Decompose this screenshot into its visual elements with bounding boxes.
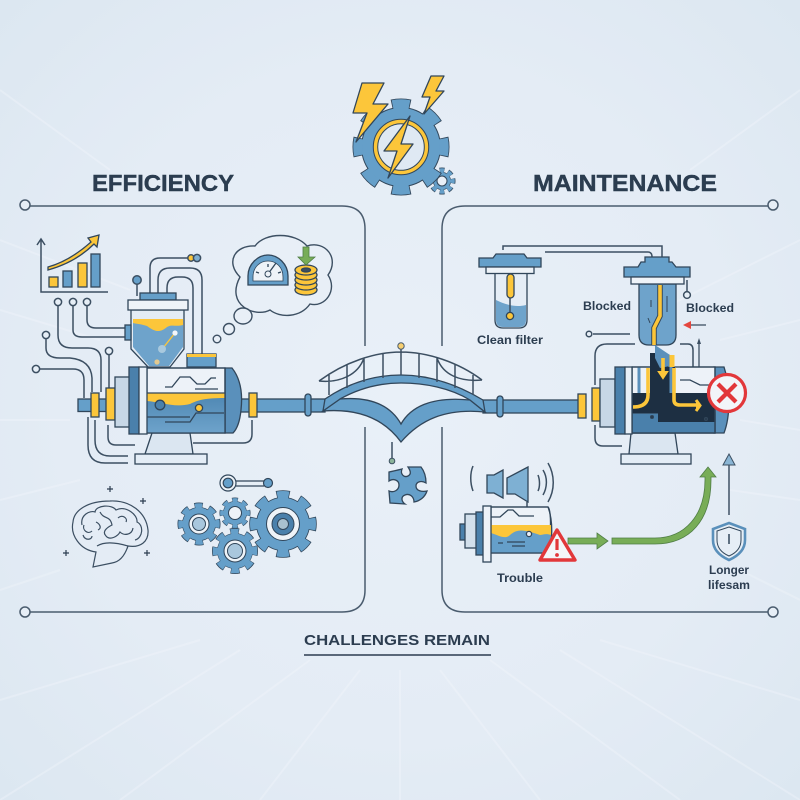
icon: down arrow — [298, 247, 315, 265]
label: blocked right: Blocked — [686, 301, 734, 315]
thought bubble: gauge and coins — [213, 236, 332, 343]
icon: brain — [63, 486, 150, 567]
gear c — [216, 532, 254, 570]
icon: gear with lightning — [353, 76, 452, 191]
label: longer lifesam: lifesam — [708, 578, 750, 592]
icon: gauge — [248, 255, 288, 285]
icon: small bolt — [422, 76, 444, 114]
illustration: blocked filter — [624, 257, 690, 345]
icon: coin stack — [295, 265, 317, 295]
panel: efficiency frame — [20, 200, 365, 617]
panel: maintenance frame — [442, 200, 778, 617]
arrow: red pointer — [683, 321, 706, 329]
illustration: right pump — [578, 345, 746, 464]
icon: warning triangle — [540, 530, 575, 560]
pump housing — [115, 367, 242, 434]
gear link — [220, 475, 272, 491]
filter hopper — [125, 293, 216, 367]
pump base — [135, 433, 207, 464]
icon: gears cluster — [181, 475, 312, 570]
arrow: up life — [723, 454, 735, 515]
label: longer lifesam: Longer — [709, 563, 749, 577]
pipeline: main shaft — [78, 394, 580, 417]
label: clean filter: Clean filter — [477, 333, 543, 347]
heading: maintenance: MAINTENANCE — [533, 170, 717, 196]
icon: speakers — [471, 463, 553, 512]
arrow: green curve — [612, 467, 716, 544]
heading: challenges remain: CHALLENGES REMAIN — [304, 632, 490, 649]
illustration: clean filter — [479, 246, 662, 328]
icon: centre bolt — [384, 116, 413, 178]
icon: puzzle piece — [389, 467, 427, 504]
icon: shield — [713, 523, 745, 560]
illustration: left pump — [91, 293, 257, 464]
gear a — [181, 506, 217, 542]
label: blocked left: Blocked — [583, 299, 631, 313]
gear d — [254, 495, 312, 553]
bridge truss — [319, 348, 482, 395]
wiring: left pump — [32, 254, 252, 463]
label: longer lifesam — [708, 563, 750, 592]
yellow flow arrows — [633, 355, 700, 411]
wiring: right pump — [586, 280, 701, 446]
illustration: trouble pump — [460, 463, 575, 562]
icon: large bolt — [353, 83, 388, 142]
bridge — [319, 343, 485, 442]
mini pump body — [460, 506, 552, 562]
icon: main gear — [358, 104, 444, 190]
gear b — [222, 500, 248, 526]
arrow: green short — [568, 533, 608, 549]
bridge lower v — [323, 399, 485, 442]
flanges — [91, 388, 257, 420]
connector: stem to puzzle — [389, 442, 395, 464]
icon: red x — [708, 374, 746, 412]
right flanges — [578, 388, 600, 421]
bar chart: growth — [37, 235, 108, 292]
right pump base — [621, 433, 691, 464]
label: trouble: Trouble — [497, 571, 543, 585]
bridge deck arc — [323, 375, 485, 412]
heading: efficiency: EFFICIENCY — [92, 170, 234, 196]
icon: small gear — [432, 171, 452, 191]
right pump housing — [600, 345, 729, 434]
